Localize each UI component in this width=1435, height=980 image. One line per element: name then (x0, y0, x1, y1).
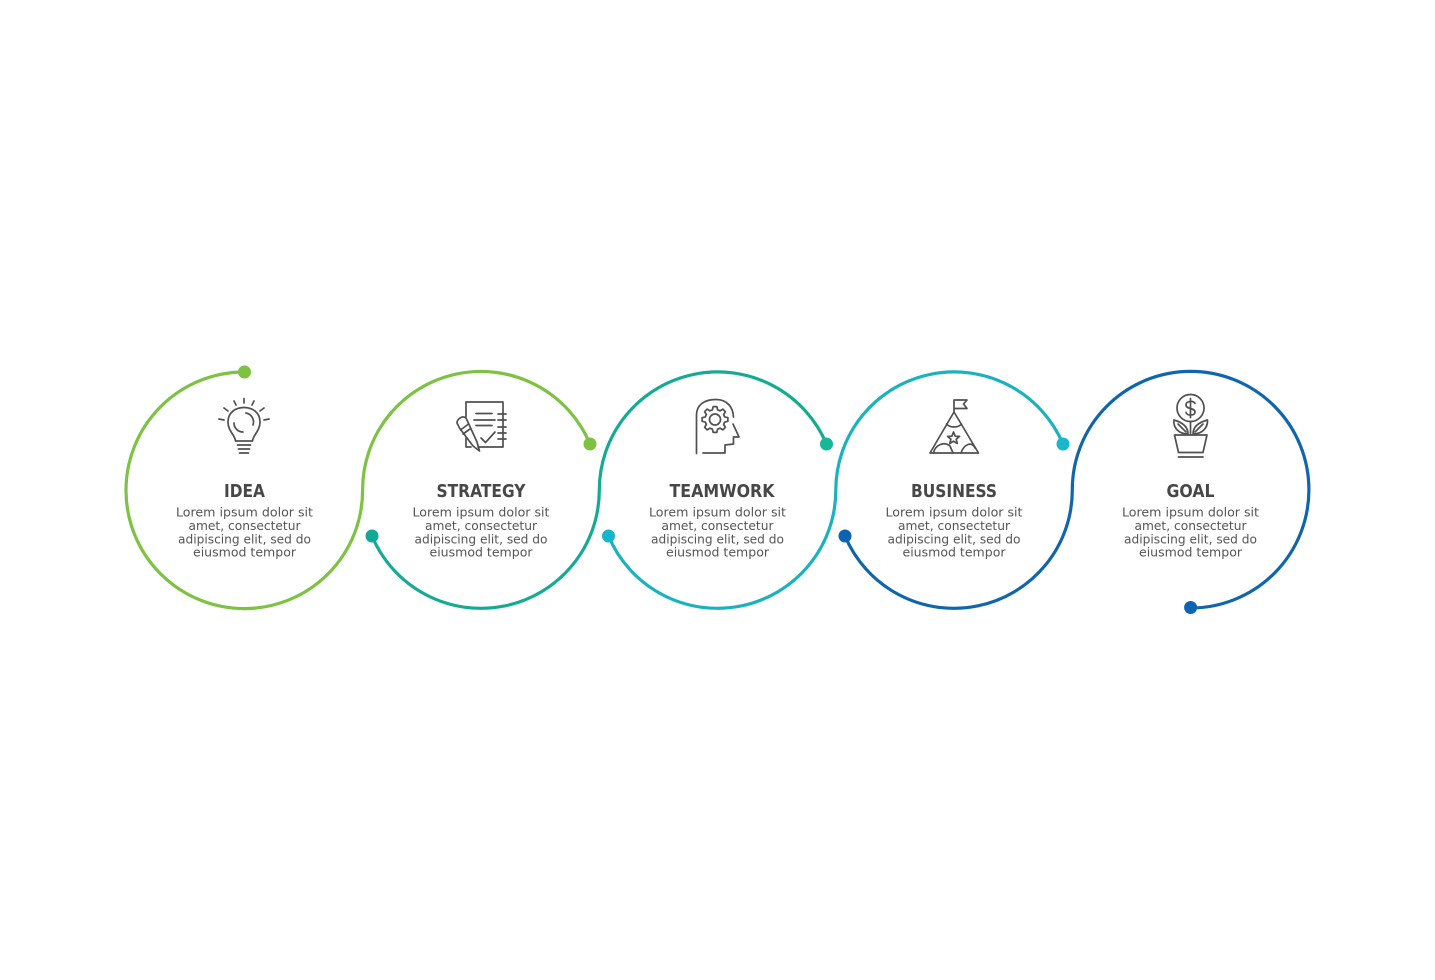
text block: teamwork description (649, 504, 786, 560)
text block: idea description: adipiscing elit, sed do (178, 531, 311, 546)
step: business (886, 400, 1023, 560)
connector: blue line, business to goal (838, 371, 1309, 614)
text block: teamwork description: Lorem ipsum dolor sit (649, 504, 786, 520)
text block: teamwork description: amet, consectetur (662, 518, 774, 533)
icon: head with gear (696, 400, 739, 454)
text block: goal description: eiusmod tempor (1139, 545, 1243, 560)
step: strategy (412, 402, 550, 560)
text block: goal description (1122, 504, 1259, 560)
connector: green line, idea to strategy (126, 366, 597, 609)
title: goal: GOAL (1166, 482, 1214, 502)
title: strategy: STRATEGY (436, 482, 526, 502)
text block: business description: adipiscing elit, sed do (888, 531, 1021, 546)
text block: business description (886, 504, 1023, 560)
text block: idea description: amet, consectetur (188, 518, 301, 533)
text block: idea description: eiusmod tempor (193, 545, 297, 560)
text block: teamwork description: adipiscing elit, sed do (651, 531, 784, 546)
text block: goal description: Lorem ipsum dolor sit (1122, 504, 1259, 520)
title: business: BUSINESS (911, 482, 997, 502)
text block: goal description: amet, consectetur (1134, 518, 1247, 533)
step: teamwork (649, 400, 786, 560)
text block: idea description: Lorem ipsum dolor sit (176, 504, 313, 520)
text block: goal description: adipiscing elit, sed do (1124, 531, 1257, 546)
text block: strategy description: Lorem ipsum dolor sit (412, 504, 550, 520)
text block: business description: eiusmod tempor (902, 545, 1006, 560)
title: idea: IDEA (224, 482, 265, 502)
icon: money plant (1174, 394, 1208, 457)
icon: mountain with flag (930, 400, 978, 453)
text block: business description: amet, consectetur (898, 518, 1011, 533)
text block: idea description (176, 504, 313, 560)
step: idea (176, 398, 313, 560)
text block: business description: Lorem ipsum dolor sit (886, 504, 1023, 520)
title: teamwork: TEAMWORK (670, 482, 776, 502)
icon: light bulb (219, 398, 269, 453)
text block: teamwork description: eiusmod tempor (666, 545, 770, 560)
text block: strategy description: adipiscing elit, sed do (414, 531, 548, 546)
connector: teal line, strategy to teamwork (366, 372, 833, 608)
text block: strategy description: amet, consectetur (425, 518, 538, 533)
connector: cyan line, teamwork to business (602, 372, 1070, 608)
text block: strategy description: eiusmod tempor (430, 545, 533, 560)
icon: document and pen (457, 402, 506, 451)
text block: strategy description (412, 504, 550, 560)
step: goal (1122, 394, 1259, 560)
